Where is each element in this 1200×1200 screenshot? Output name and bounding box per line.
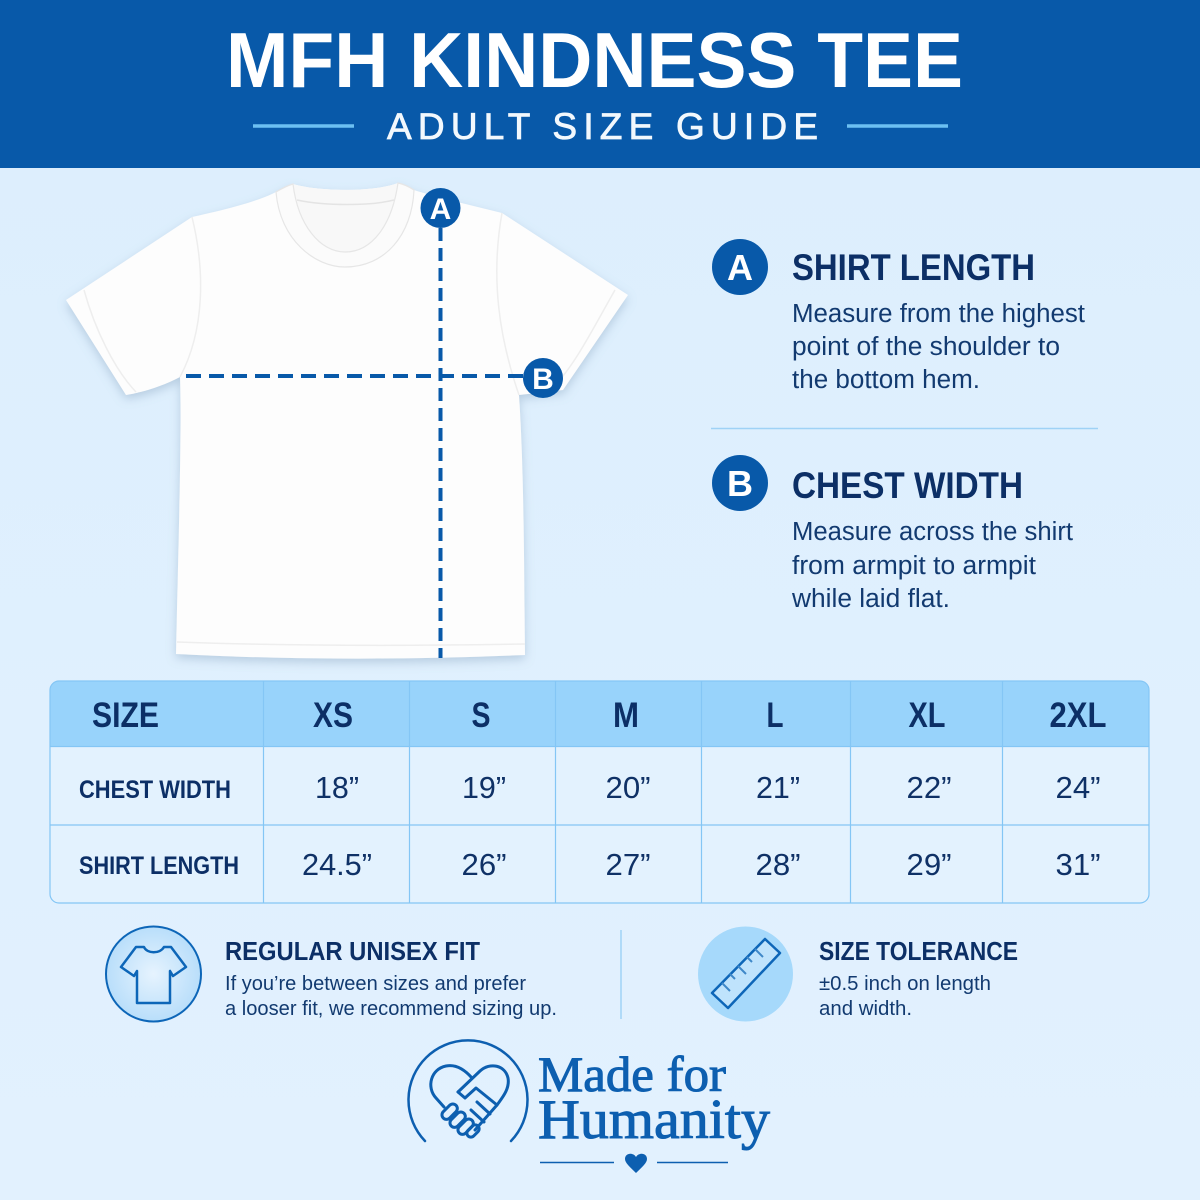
description: Measure from the highest: [792, 300, 1085, 328]
description: Measure across the shirt: [792, 518, 1073, 546]
wordmark: Humanity: [538, 1089, 770, 1151]
row: chest width: 20”: [606, 770, 650, 805]
wordmark: Made for: [538, 1046, 726, 1102]
row: shirt length: SHIRT LENGTH: [79, 852, 239, 880]
row: chest width: 24”: [1056, 770, 1100, 805]
t-shirt: [66, 183, 628, 659]
description: [792, 300, 1085, 394]
heading: REGULAR UNISEX FIT: [225, 938, 480, 966]
row: chest width: 19”: [462, 770, 506, 805]
description: ±0.5 inch on length: [819, 973, 991, 995]
row: shirt length: 28”: [756, 847, 800, 882]
heading: SIZE TOLERANCE: [819, 938, 1018, 966]
description: while laid flat.: [791, 585, 950, 613]
marker B: [523, 358, 563, 398]
description: If you’re between sizes and prefer: [225, 973, 526, 995]
note: size tolerance: [698, 926, 1018, 1022]
row: chest width: [79, 770, 1100, 805]
subtitle: ADULT SIZE GUIDE: [387, 106, 818, 147]
marker A: A: [430, 193, 451, 226]
icon: handshake heart: [409, 1040, 528, 1141]
description: and width.: [819, 998, 912, 1020]
badge A: A: [727, 247, 753, 288]
logo: Made for Humanity: [409, 1040, 770, 1173]
description: a looser fit, we recommend sizing up.: [225, 998, 557, 1020]
description: [791, 518, 1073, 613]
description: point of the shoulder to: [792, 333, 1060, 361]
row: chest width: 21”: [756, 770, 800, 805]
badge B: B: [727, 463, 753, 504]
icon: t-shirt: [106, 926, 201, 1022]
header row: XS: [313, 696, 353, 735]
measurement line: chest: [186, 374, 526, 378]
row: shirt length: 29”: [906, 847, 952, 882]
row: chest width: 22”: [906, 770, 952, 805]
marker B: B: [532, 363, 554, 396]
description: the bottom hem.: [792, 366, 980, 394]
description: from armpit to armpit: [792, 552, 1036, 580]
wordmark: [538, 1046, 770, 1151]
badge B: [712, 455, 768, 511]
header row: XL: [908, 696, 946, 735]
description: [225, 973, 557, 1020]
row: shirt length: 24.5”: [302, 847, 372, 882]
header banner: [0, 0, 1200, 168]
badge A: [712, 239, 768, 295]
header row: [92, 696, 1106, 735]
title: MFH KINDNESS TEE: [226, 16, 963, 104]
row: shirt length: 26”: [462, 847, 506, 882]
row: shirt length: 27”: [606, 847, 650, 882]
panel: shirt length: [712, 239, 1085, 394]
header row: SIZE: [92, 696, 159, 735]
header row: L: [766, 696, 784, 735]
heading: SHIRT LENGTH: [792, 247, 1035, 288]
row: shirt length: [79, 847, 1100, 882]
row: shirt length: 31”: [1056, 847, 1100, 882]
subtitle rules: [253, 124, 948, 128]
size table: [50, 681, 1149, 903]
header row: 2XL: [1050, 696, 1106, 735]
measurement line: length: [438, 228, 442, 658]
marker A: [420, 188, 460, 228]
heading: CHEST WIDTH: [792, 465, 1023, 506]
t-shirt diagram: [66, 183, 628, 659]
row: chest width: CHEST WIDTH: [79, 776, 231, 804]
header row: S: [472, 696, 490, 735]
header row: M: [613, 696, 639, 735]
icon: ruler: [698, 926, 793, 1022]
note: regular unisex fit: [106, 926, 557, 1022]
icon: small heart with rules: [540, 1154, 728, 1173]
description: [819, 973, 991, 1020]
row: chest width: 18”: [315, 770, 359, 805]
panel: chest width: [712, 455, 1073, 613]
